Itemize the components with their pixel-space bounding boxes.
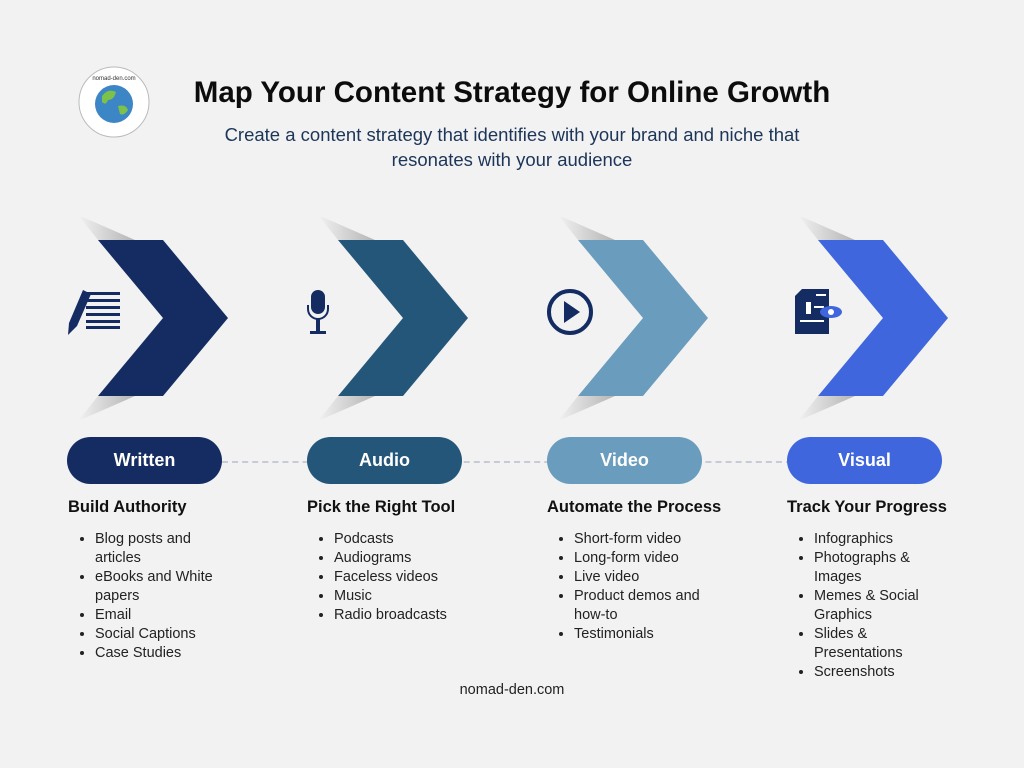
chevron: audio bbox=[318, 215, 468, 421]
logo bbox=[78, 66, 150, 138]
chevrons bbox=[68, 218, 948, 417]
list: visual: Infographics bbox=[814, 531, 893, 547]
list: video: Long-form video bbox=[574, 550, 679, 566]
list: visual bbox=[799, 531, 919, 680]
list: written bbox=[80, 531, 213, 661]
list: audio: Audiograms bbox=[334, 550, 411, 566]
list: visual: Slides & Presentations bbox=[814, 626, 903, 661]
list: visual: Screenshots bbox=[814, 664, 895, 680]
icon: play bbox=[549, 291, 591, 333]
title: Map Your Content Strategy for Online Growth bbox=[194, 76, 830, 109]
list: video: Short-form video bbox=[574, 531, 681, 547]
pill: Video bbox=[547, 437, 702, 484]
heading: Track Your Progress: Track Your Progress bbox=[787, 498, 947, 516]
list: audio: Faceless videos bbox=[334, 569, 438, 585]
icon: document with eye bbox=[795, 289, 842, 334]
chevron: visual bbox=[798, 215, 948, 421]
list: audio: Radio broadcasts bbox=[334, 607, 447, 623]
heading: Pick the Right Tool: Pick the Right Tool bbox=[307, 498, 455, 516]
heading: Automate the Process: Automate the Process bbox=[547, 498, 721, 516]
logo: nomad-den.com bbox=[92, 76, 136, 82]
list: visual: Photographs & Images bbox=[814, 550, 910, 585]
list: audio bbox=[319, 531, 447, 623]
pill: Written: Written bbox=[114, 450, 175, 470]
pill: Visual bbox=[787, 437, 942, 484]
list: audio: Podcasts bbox=[334, 531, 394, 547]
list: video: Testimonials bbox=[574, 626, 654, 642]
list: visual: Memes & Social Graphics bbox=[814, 588, 919, 623]
footer: nomad-den.com bbox=[460, 682, 564, 698]
chevron: video bbox=[558, 215, 708, 421]
pill: Written bbox=[67, 437, 222, 484]
subtitle: Create a content strategy that identifies with your brand and niche that resonates with your audience bbox=[225, 124, 799, 170]
icon: microphone bbox=[307, 290, 329, 334]
pill: Visual: Visual bbox=[838, 450, 891, 470]
list: audio: Music bbox=[334, 588, 372, 604]
pill: Audio: Audio bbox=[359, 450, 410, 470]
chevron: written bbox=[78, 215, 228, 421]
heading: Build Authority: Build Authority bbox=[68, 498, 187, 516]
list: written: Social Captions bbox=[95, 626, 196, 642]
connector line bbox=[222, 461, 792, 463]
list: written: Email bbox=[95, 607, 131, 623]
list: video bbox=[559, 531, 700, 642]
pill: Video: Video bbox=[600, 450, 649, 470]
list: written: Blog posts and articles bbox=[95, 531, 191, 566]
icon: pen and lines bbox=[68, 290, 120, 335]
pill: Audio bbox=[307, 437, 462, 484]
list: written: Case Studies bbox=[95, 645, 181, 661]
list: video: Live video bbox=[574, 569, 639, 585]
list: video: Product demos and how-to bbox=[574, 588, 700, 623]
list: written: eBooks and White papers bbox=[95, 569, 213, 604]
